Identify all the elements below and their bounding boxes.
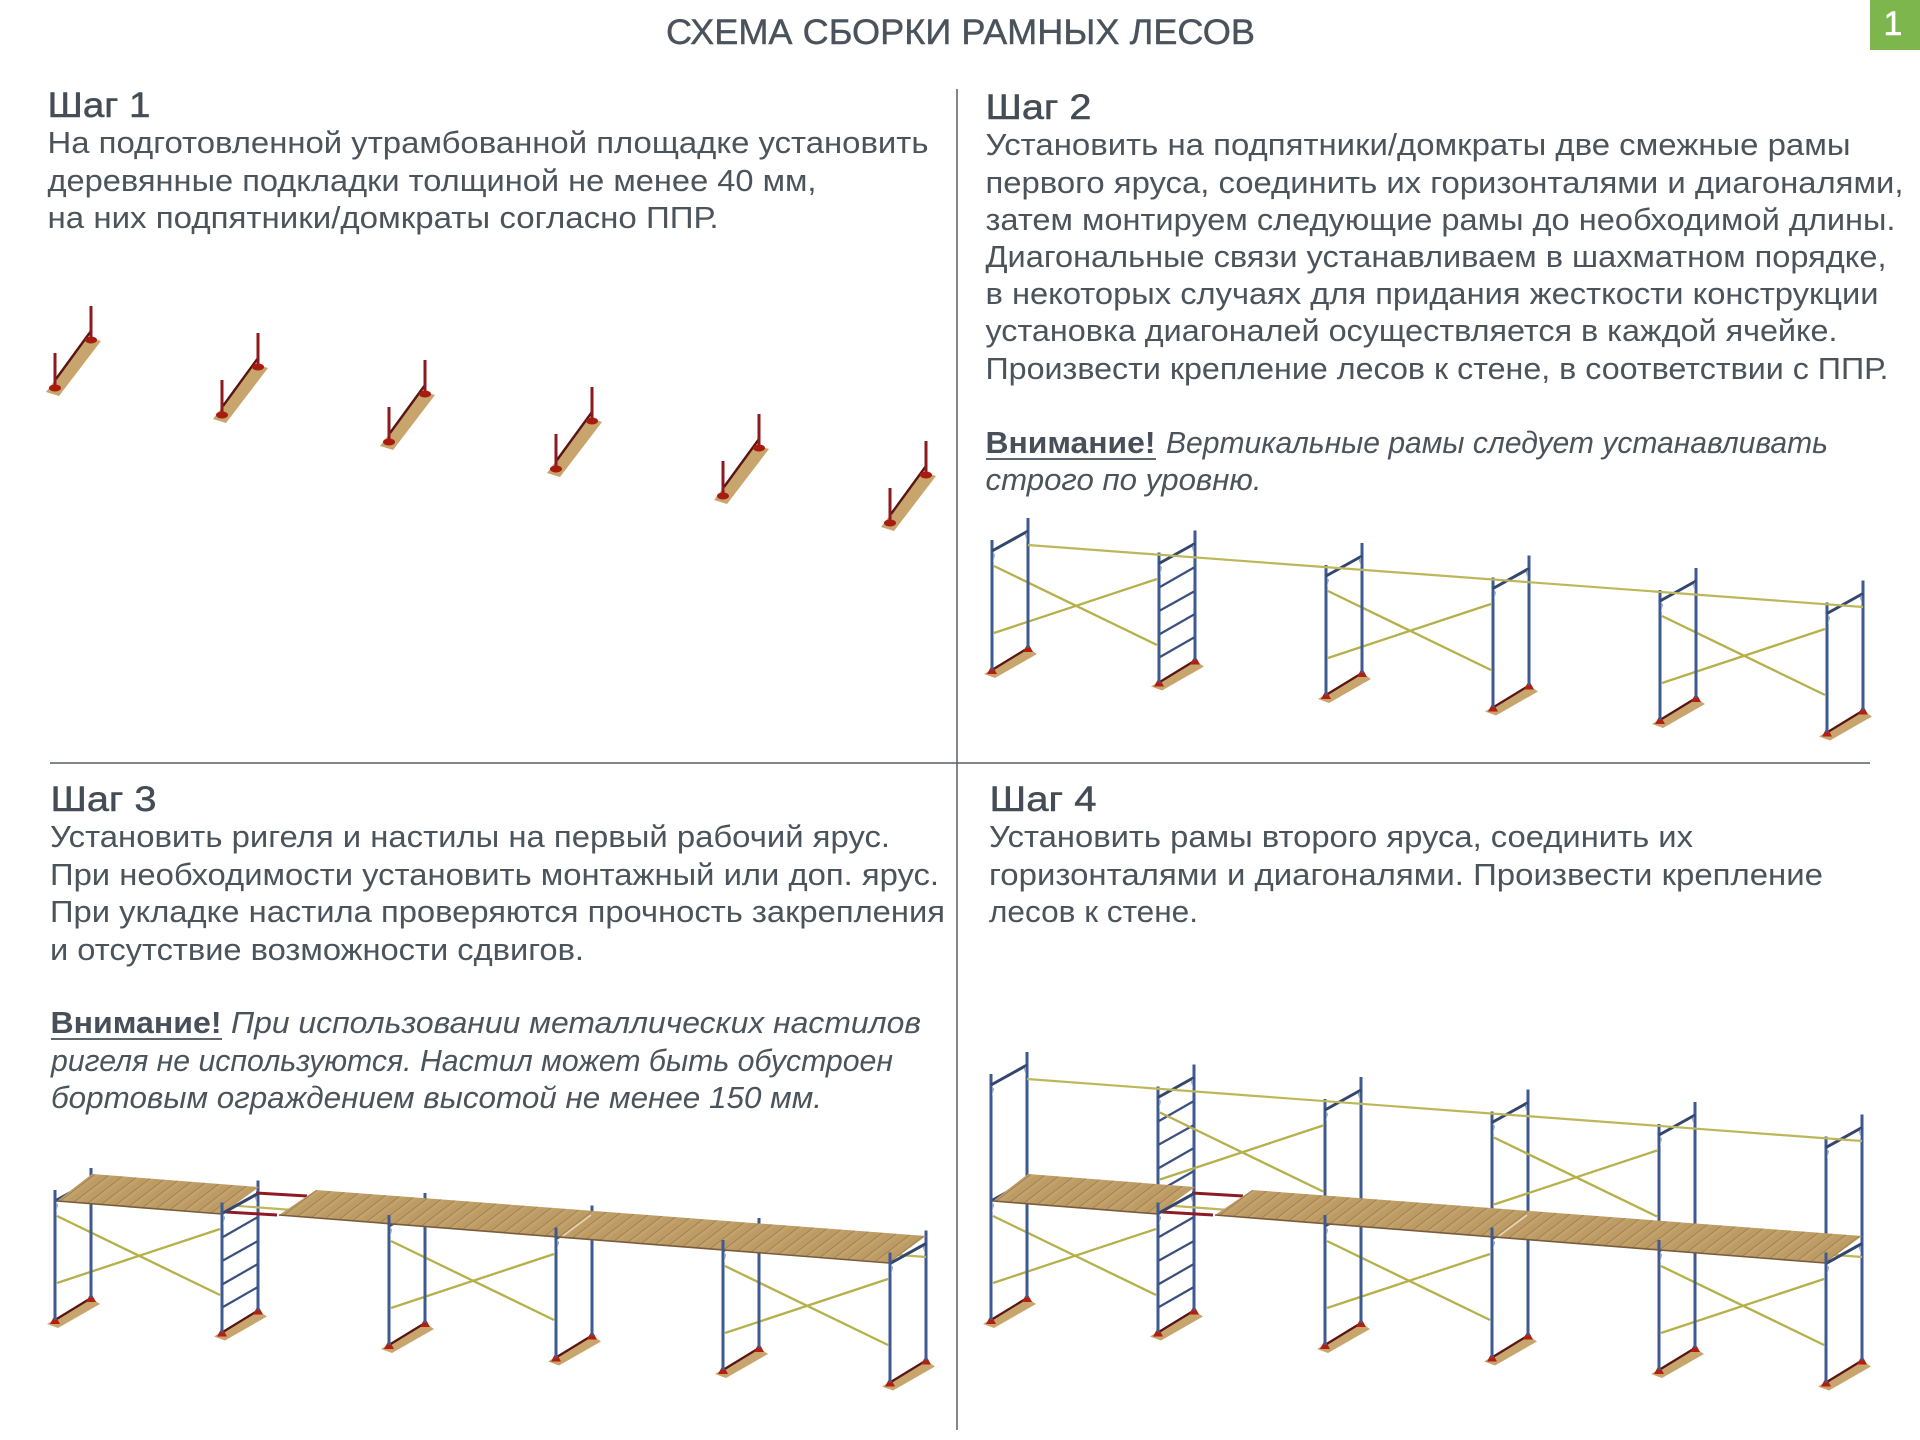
- vertical divider: [956, 89, 958, 1430]
- heading: step 4: Шаг 4: [990, 780, 1096, 819]
- title: СХЕМА СБОРКИ РАМНЫХ ЛЕСОВ: [666, 13, 1255, 52]
- text block: step 2: Диагональные связи устанавливаем в шахматном порядке,: [986, 239, 1886, 274]
- text block: step 2: установка диагоналей осуществляется в каждой ячейке.: [986, 313, 1838, 348]
- text block: step 1: [48, 125, 928, 235]
- second tier frames: [991, 1052, 1862, 1266]
- heading: step 2: Шаг 2: [986, 88, 1092, 127]
- text block: step 3: [50, 819, 945, 967]
- text block: step 1: На подготовленной утрамбованной площадке установить: [48, 125, 928, 160]
- callout: step 3 warning: [50, 1005, 921, 1115]
- illustration: first tier frames with diagonals: [984, 518, 1872, 740]
- callout: step 3 warning: При использовании металлических настилов: [231, 1005, 921, 1040]
- text block: step 4: Установить рамы второго яруса, соединить их: [989, 819, 1694, 854]
- text block: step 2: в некоторых случаях для придания жесткости конструкции: [986, 276, 1878, 311]
- text block: step 4: [989, 819, 1823, 929]
- callout: step 2 warning: [986, 425, 1828, 497]
- text block: step 2: первого яруса, соединить их горизонталями и диагоналями,: [986, 165, 1904, 200]
- callout: step 3 warning: бортовым ограждением высотой не менее 150 мм.: [51, 1080, 822, 1115]
- callout: step 3 warning: Внимание!: [50, 1005, 222, 1040]
- text block: step 2: [986, 127, 1904, 386]
- panel: step 1: [46, 86, 936, 531]
- text block: step 3: Установить ригеля и настилы на первый рабочий ярус.: [50, 819, 890, 854]
- callout: step 2 warning: Вертикальные рамы следует устанавливать: [1166, 425, 1828, 460]
- text block: step 1: деревянные подкладки толщиной не менее 40 мм,: [48, 163, 816, 198]
- callout: step 2 warning: Внимание!: [986, 425, 1156, 460]
- illustration: first tier with decking: [47, 1168, 935, 1390]
- horizontal divider: [50, 762, 1870, 764]
- text block: step 2: затем монтируем следующие рамы до необходимой длины.: [986, 202, 1896, 237]
- heading: step 1: Шаг 1: [48, 86, 150, 125]
- heading: step 3: Шаг 3: [50, 780, 156, 819]
- text block: step 3: и отсутствие возможности сдвигов.: [50, 932, 584, 967]
- text block: step 2: Установить на подпятники/домкраты две смежные рамы: [986, 127, 1850, 162]
- illustration: wooden pads with jacks: [46, 306, 936, 531]
- callout: step 3 warning: ригеля не используются. Настил может быть обустроен: [50, 1043, 893, 1078]
- page number badge: [1870, 0, 1920, 50]
- panel: step 2: [984, 88, 1904, 740]
- text block: step 2: Произвести крепление лесов к стене, в соответствии с ППР.: [986, 351, 1888, 386]
- text block: step 1: на них подпятники/домкраты согласно ППР.: [48, 200, 718, 235]
- text block: step 3: При укладке настила проверяются прочность закрепления: [50, 894, 945, 929]
- text block: step 4: горизонталями и диагоналями. Произвести крепление: [989, 857, 1823, 892]
- panel: step 4: [983, 780, 1871, 1390]
- page number badge: 1: [1884, 5, 1902, 43]
- panel: step 3: [47, 780, 945, 1390]
- illustration: two tier scaffold: [983, 1052, 1871, 1390]
- text block: step 3: При необходимости установить монтажный или доп. ярус.: [50, 857, 939, 892]
- callout: step 2 warning: строго по уровню.: [986, 462, 1262, 497]
- text block: step 4: лесов к стене.: [989, 894, 1198, 929]
